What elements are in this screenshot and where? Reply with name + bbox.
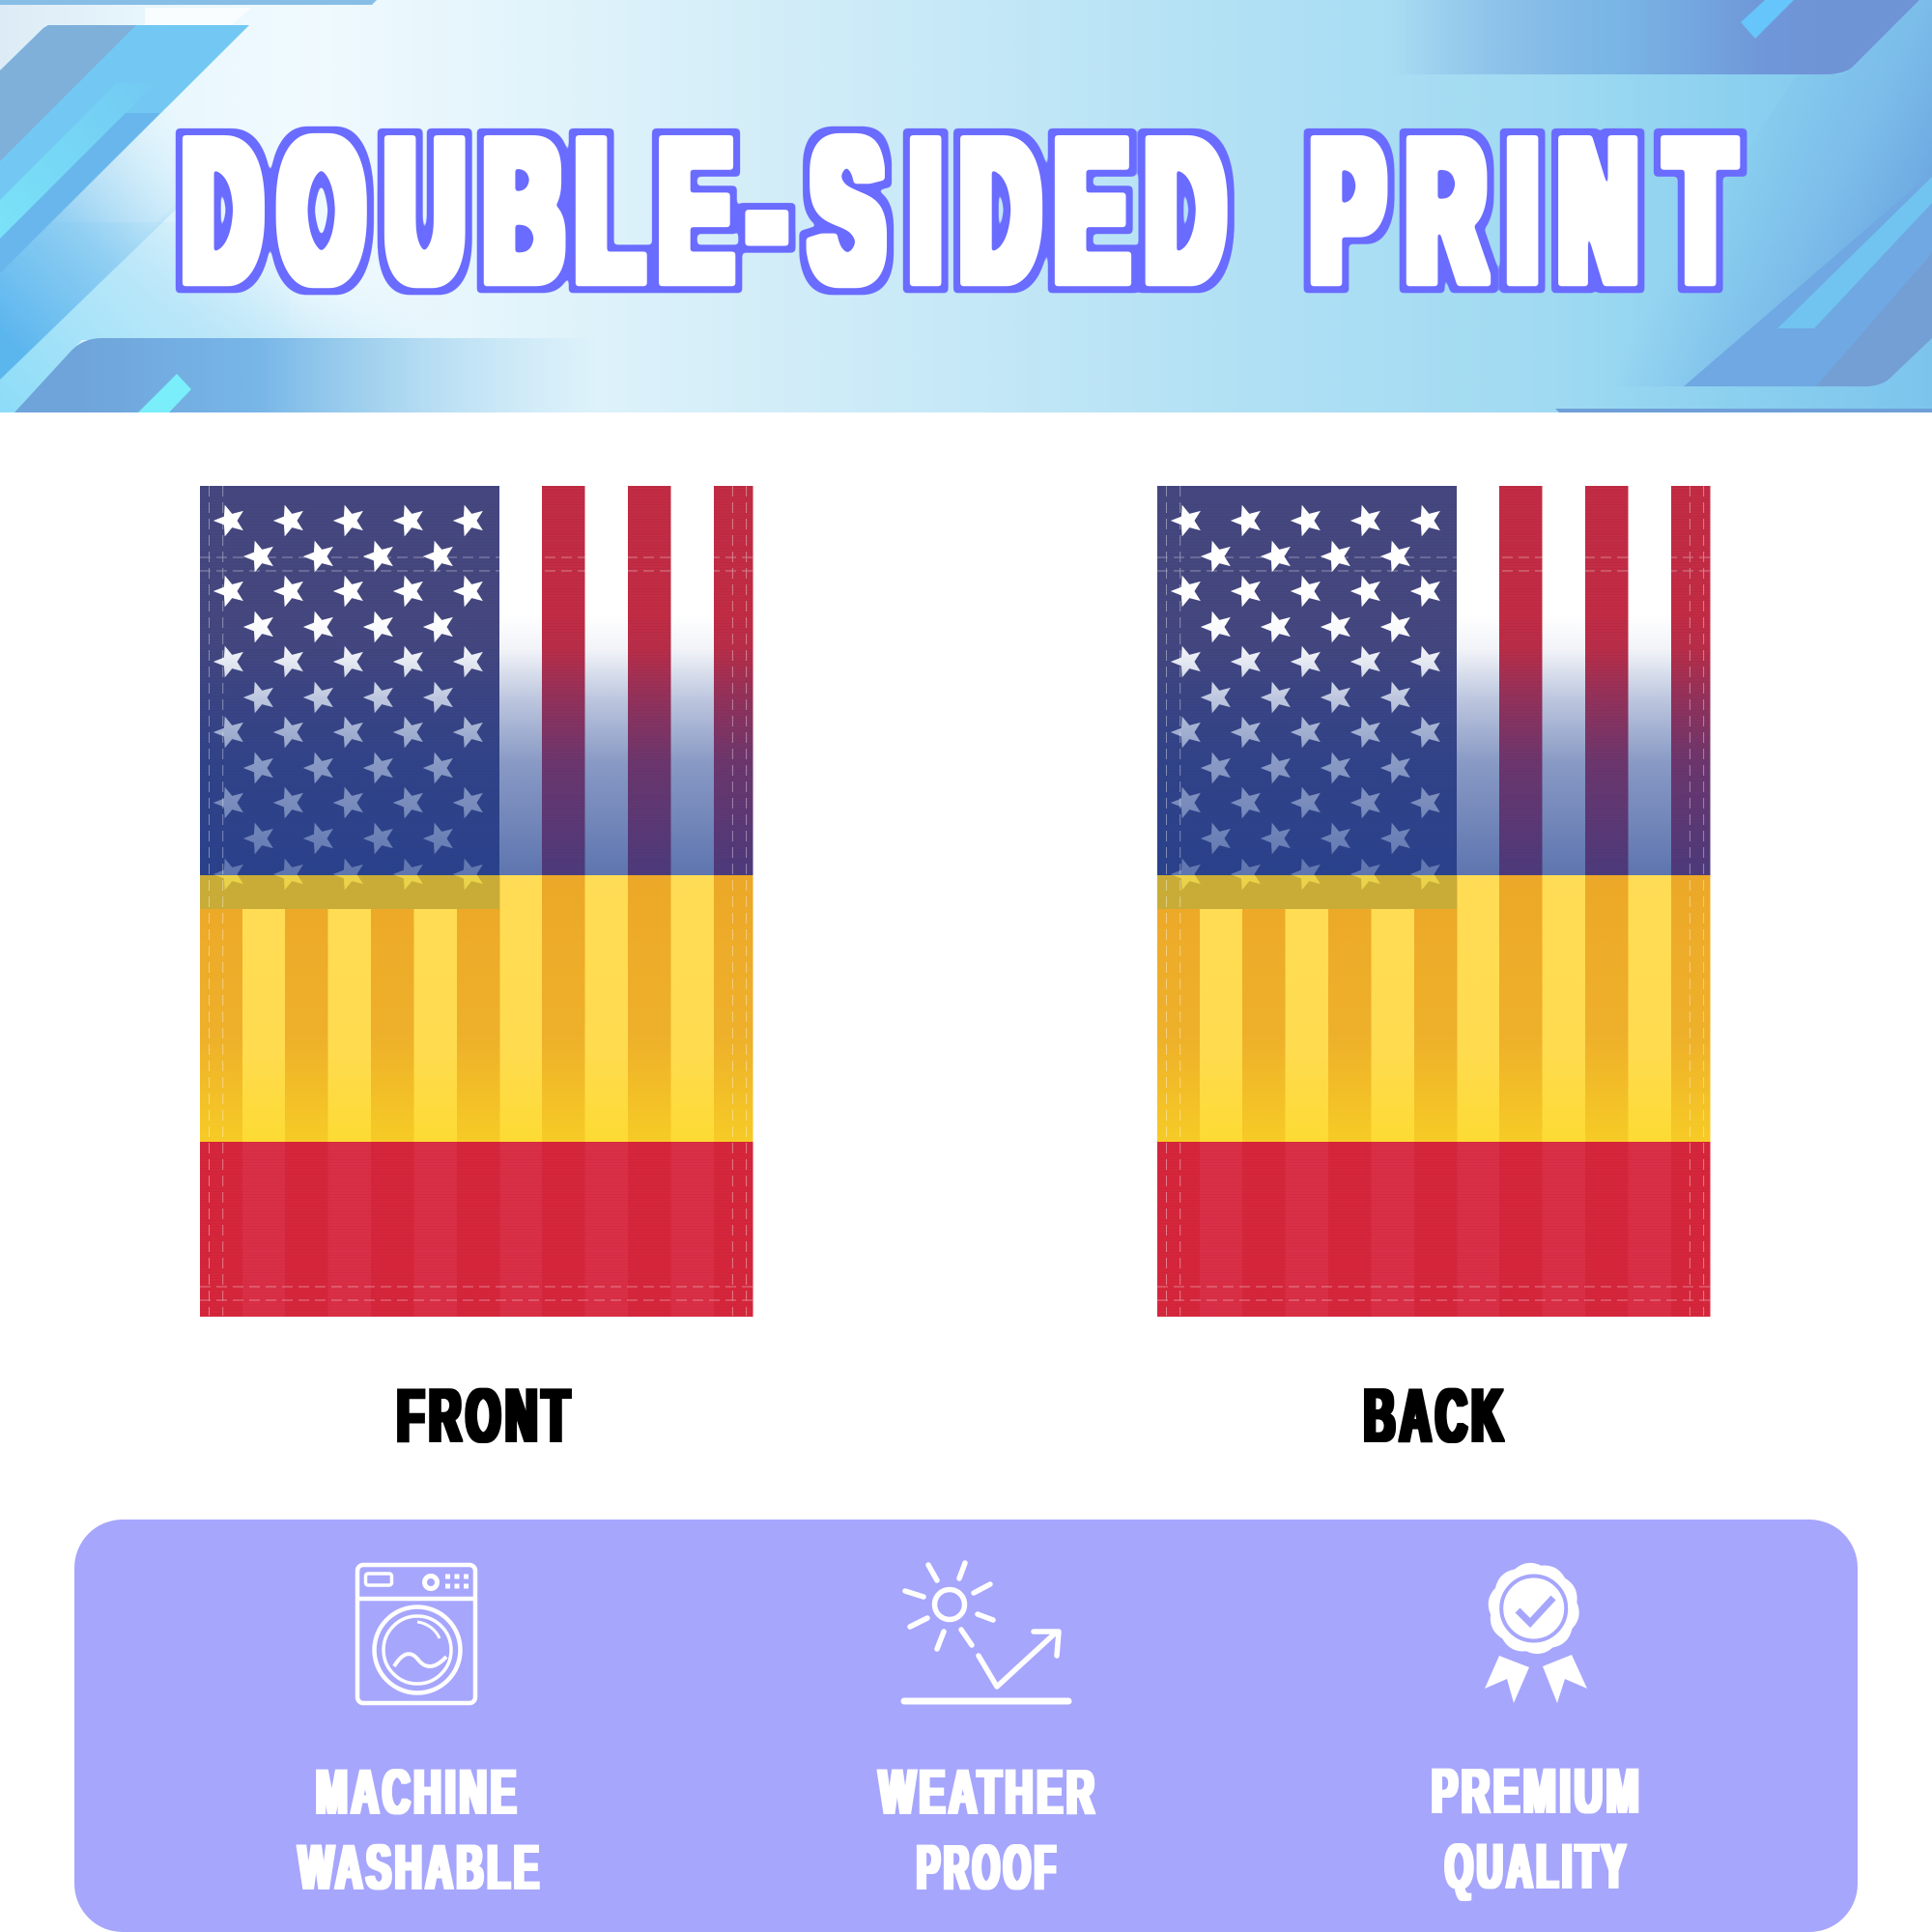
label: premium quality: QUALITY (1445, 1833, 1630, 1902)
front flag canton and stripes (200, 486, 753, 875)
label: premium quality (1432, 1754, 1643, 1902)
label: machine washable: MACHINE (316, 1756, 520, 1828)
icon: sun with check arrow (904, 1563, 1068, 1701)
icon: washing machine (357, 1565, 475, 1703)
front label: FRONT (397, 1373, 575, 1458)
label: weather proof (879, 1756, 1098, 1903)
title: DOUBLE-SIDED PRINT (184, 97, 1733, 324)
back flag canton and stripes (1157, 486, 1710, 875)
header banner (0, 0, 1932, 412)
icon: quality rosette (1485, 1563, 1587, 1703)
back flag red band (1157, 1142, 1710, 1317)
label: premium quality: PREMIUM (1432, 1754, 1643, 1827)
front flag (200, 486, 753, 1317)
label: weather proof: PROOF (917, 1833, 1060, 1903)
front flag stars (213, 505, 483, 890)
label: machine washable (298, 1756, 543, 1903)
front flag red band (200, 1142, 753, 1317)
back flag stars (1171, 505, 1440, 890)
back flag (1157, 486, 1710, 1317)
label: weather proof: WEATHER (879, 1756, 1098, 1828)
panel: features (74, 1520, 1858, 1932)
back flag yellow band (1157, 859, 1710, 1142)
back label: BACK (1364, 1375, 1507, 1458)
front flag yellow band (200, 859, 753, 1142)
label: machine washable: WASHABLE (298, 1833, 543, 1903)
